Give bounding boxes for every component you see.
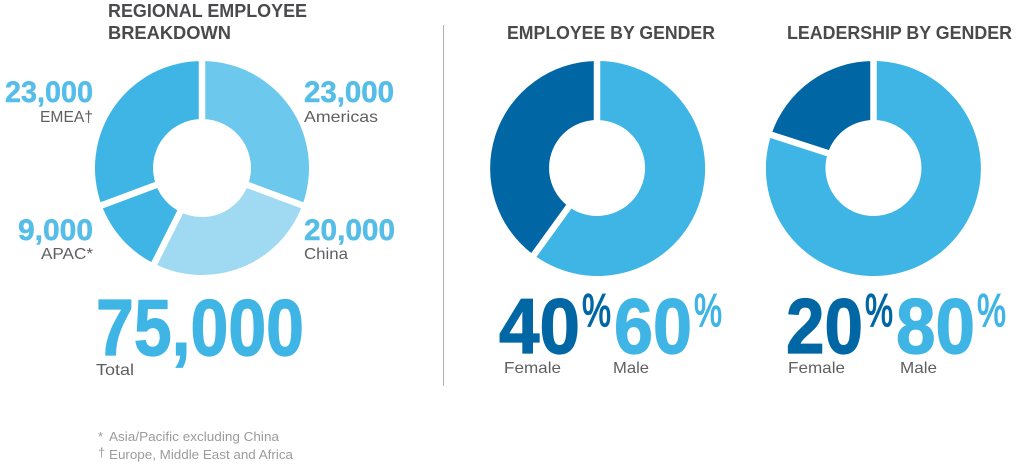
donut chart: employee by gender bbox=[490, 55, 705, 276]
stat: China 20,000: China bbox=[304, 246, 348, 263]
stat: APAC 9,000: APAC* bbox=[41, 246, 93, 263]
stat: male 80%: Male bbox=[900, 360, 937, 377]
stat: male 60%: 60 bbox=[614, 282, 692, 370]
footnotes bbox=[98, 429, 294, 462]
stat: female 20%: 20 bbox=[786, 282, 863, 370]
heading: regional employee breakdown bbox=[108, 1, 307, 43]
stat: EMEA 23,000: EMEA† bbox=[40, 109, 93, 126]
donut chart: regional breakdown bbox=[94, 55, 310, 275]
stat: Americas 23,000: Americas bbox=[304, 109, 378, 126]
donut chart: leadership by gender bbox=[762, 55, 981, 276]
stat: male 80%: % bbox=[977, 284, 1006, 336]
stat: China 20,000: 20,000 bbox=[304, 214, 395, 247]
heading: regional employee breakdown: BREAKDOWN bbox=[108, 23, 231, 43]
footnotes: * bbox=[98, 429, 103, 444]
stat: male 60%: % bbox=[694, 284, 722, 336]
stat: female 40%: % bbox=[582, 284, 611, 336]
panel: regional employee breakdown bbox=[5, 1, 395, 462]
footnotes: † bbox=[98, 445, 105, 460]
stat: female 20%: Female bbox=[788, 360, 845, 377]
stat: male 80%: 80 bbox=[896, 282, 975, 370]
stat: female 40%: 40 bbox=[499, 282, 580, 370]
heading: leadership by gender: LEADERSHIP BY GENDER bbox=[787, 23, 1012, 43]
stat: total 75,000: 75,000 bbox=[96, 283, 304, 372]
stat: APAC 9,000: 9,000 bbox=[18, 214, 93, 247]
stat: Americas 23,000: 23,000 bbox=[304, 76, 394, 109]
panel: employee by gender bbox=[490, 23, 722, 377]
footnotes: Asia/Pacific excluding China bbox=[109, 429, 280, 444]
heading: employee by gender: EMPLOYEE BY GENDER bbox=[507, 23, 715, 43]
footnotes: Europe, Middle East and Africa bbox=[109, 447, 294, 462]
stat: female 40%: Female bbox=[504, 360, 561, 377]
stat: China 20,000 bbox=[304, 214, 395, 263]
stat: EMEA 23,000 bbox=[5, 76, 93, 126]
stat: APAC 9,000 bbox=[18, 214, 93, 263]
panel: leadership by gender bbox=[762, 23, 1012, 377]
stat: EMEA 23,000: 23,000 bbox=[5, 76, 93, 109]
heading: regional employee breakdown: REGIONAL EMPLOYEE bbox=[108, 1, 307, 21]
stat: female 20%: % bbox=[865, 284, 893, 336]
stat: total 75,000: Total bbox=[96, 362, 134, 379]
stat: male 60%: Male bbox=[613, 360, 649, 377]
stat: Americas 23,000 bbox=[304, 76, 394, 126]
